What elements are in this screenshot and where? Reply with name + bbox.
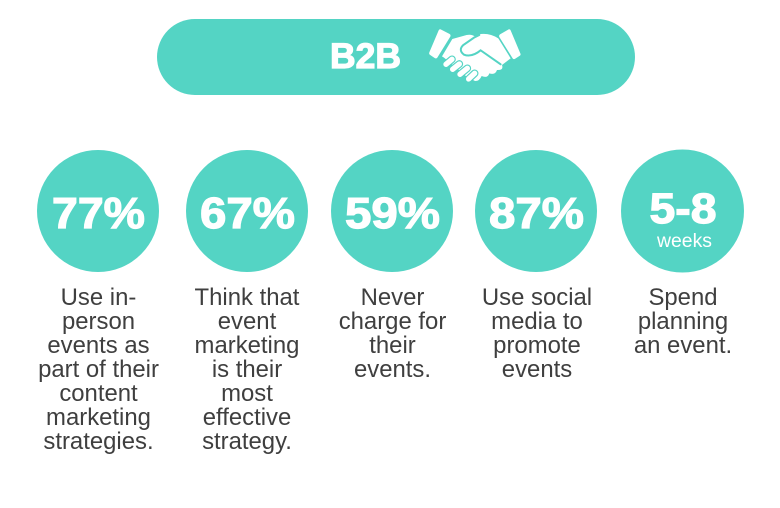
- description: 67%: Think that: [195, 284, 300, 311]
- description: 59%: Never: [361, 284, 424, 311]
- icon: handshake: [429, 29, 521, 81]
- stat: 87%: [475, 150, 597, 383]
- stat: 5-8 weeks: 5-8: [650, 185, 716, 233]
- description: 59%: events.: [354, 356, 431, 383]
- description: 77%: person: [62, 308, 135, 335]
- heading: B2B: B2B: [330, 37, 401, 76]
- description: 67%: effective: [203, 404, 291, 431]
- description: 5-8 weeks: Spend: [648, 284, 718, 311]
- description: 59%: charge for: [339, 308, 446, 335]
- description: 5-8 weeks: an event.: [634, 332, 732, 359]
- description: 67%: event: [218, 308, 277, 335]
- description: 59%: their: [369, 332, 416, 359]
- stat: 59%: [331, 150, 453, 383]
- description: 67%: is their: [212, 356, 282, 383]
- description: 77%: events as: [47, 332, 150, 359]
- description: 77%: strategies.: [43, 428, 154, 455]
- banner: B2B: [157, 19, 635, 95]
- description: 77%: Use in-: [61, 284, 136, 311]
- stat: 77%: [37, 150, 159, 455]
- description: 77%: marketing: [46, 404, 151, 431]
- stat: 67%: [186, 150, 308, 455]
- description: 67%: marketing: [195, 332, 299, 359]
- description: 77%: part of their: [38, 356, 159, 383]
- description: 67%: most: [221, 380, 273, 407]
- label: weeks: weeks: [656, 231, 712, 252]
- description: 77%: content: [59, 380, 138, 407]
- stat: 67%: 67%: [200, 189, 295, 238]
- description: 87%: events: [502, 356, 572, 383]
- stat: 77%: 77%: [52, 189, 145, 238]
- description: 67%: strategy.: [202, 428, 292, 455]
- description: 87%: Use social: [482, 284, 592, 311]
- description: 5-8 weeks: planning: [638, 308, 728, 335]
- description: 87%: media to: [491, 308, 583, 335]
- description: 87%: promote: [493, 332, 581, 359]
- stat: 5-8 weeks: [621, 150, 744, 359]
- stat: 87%: 87%: [489, 189, 584, 238]
- stat: 59%: 59%: [345, 189, 440, 238]
